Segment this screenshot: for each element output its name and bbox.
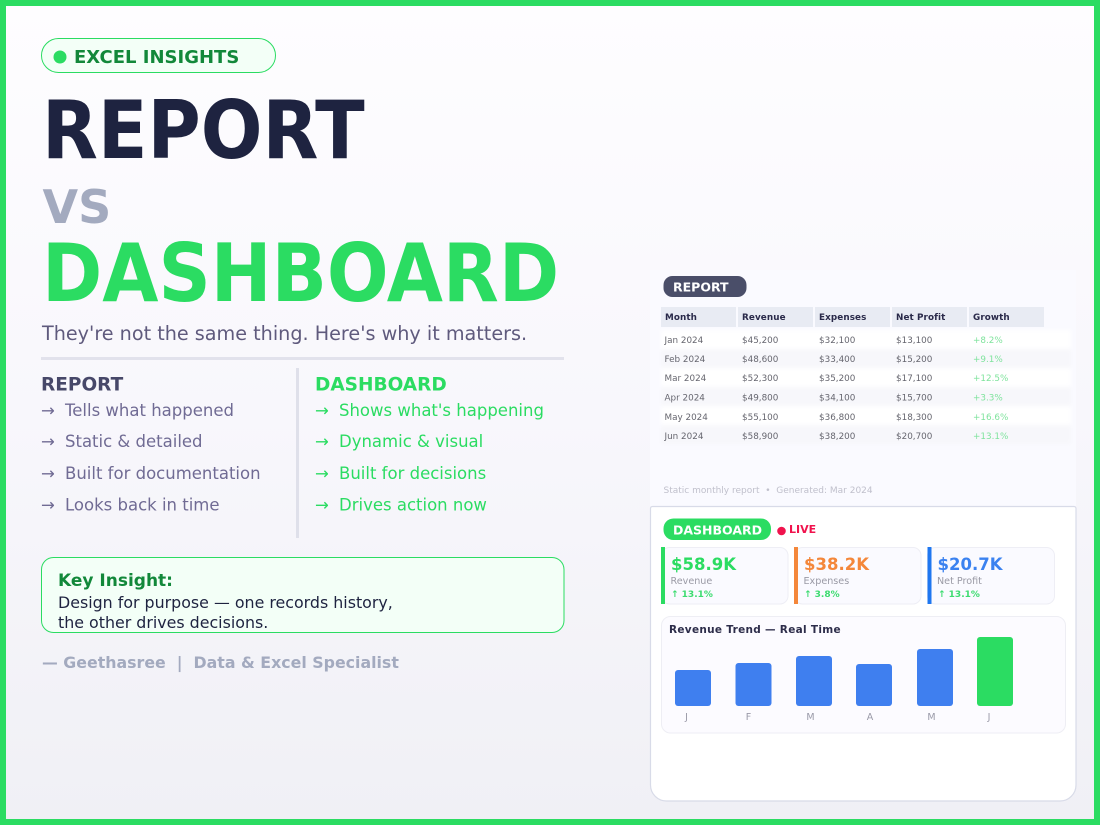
title: vs: VS [42,180,111,234]
kpi card: net profit: Net Profit [937,576,982,587]
comparison column: dashboard [315,374,544,514]
report table: Net Profit [896,313,945,323]
report table: +13.1% [973,432,1008,442]
bar chart: revenue trend: Revenue Trend — Real Time [669,624,841,636]
report table: $20,700 [896,432,933,442]
report table: Month [665,313,697,323]
callout: key insight: Design for purpose — one records history, [58,593,393,612]
comparison column: dashboard: → [315,464,329,483]
comparison column: dashboard: → [315,432,329,451]
comparison column: report: → [41,432,55,451]
report table: $35,200 [819,374,856,384]
report table: +8.2% [973,336,1003,346]
live indicator: LIVE [789,523,816,536]
report table: +12.5% [973,374,1008,384]
comparison column: report: Built for documentation [65,464,261,483]
report table: $15,200 [896,355,933,365]
callout: key insight [42,558,564,632]
comparison column: dashboard: Drives action now [339,496,487,514]
live indicator [777,523,816,536]
report table: $33,400 [819,355,856,365]
badge: excel insights: EXCEL INSIGHTS [74,47,239,68]
bar chart: revenue trend [662,616,1066,733]
kpi card: net profit [928,547,1054,604]
kpi card: revenue: Revenue [670,576,712,587]
report table: +3.3% [973,394,1003,404]
panel: dashboard [650,506,1076,801]
callout: key insight: the other drives decisions. [58,613,268,632]
comparison column: report [41,374,261,514]
panel: report [650,270,1076,506]
comparison column: report: Static & detailed [65,432,203,451]
report table: +16.6% [973,413,1008,423]
bar chart: revenue trend: M [806,712,815,723]
report table: Mar 2024 [664,374,707,384]
report table: $17,100 [896,374,933,384]
kpi card: expenses: ↑ 3.8% [804,590,840,600]
comparison column: dashboard: → [315,401,329,420]
comparison column: dashboard: Dynamic & visual [339,432,483,451]
comparison column: report: Tells what happened [64,401,234,420]
bar chart: revenue trend: A [867,712,874,723]
dashboard label: DASHBOARD [673,522,762,538]
kpi card: expenses [794,547,921,604]
comparison column: report: → [41,464,55,483]
report table: Expenses [819,313,866,323]
report table: $38,200 [819,432,856,442]
report table: Jun 2024 [664,432,704,442]
report label: REPORT [673,280,729,294]
kpi card: expenses: Expenses [804,576,849,587]
comparison column: report: REPORT [41,374,124,396]
comparison column: dashboard: Shows what's happening [339,401,544,420]
author credit: — Geethasree | Data & Excel Specialist [42,653,399,673]
bar chart: revenue trend: M [927,712,936,723]
kpi card: revenue [661,547,788,604]
report label [664,276,746,297]
report table: $58,900 [742,432,779,442]
dashboard label [664,518,771,540]
report table: $34,100 [819,394,856,404]
report footnote: Static monthly report • Generated: Mar 2024 [664,486,873,496]
comparison column: dashboard: DASHBOARD [315,374,447,396]
comparison column: report: Looks back in time [65,496,220,514]
report table: $55,100 [742,413,779,423]
comparison column: report: → [41,401,55,420]
report table: $13,100 [896,336,933,346]
report table: $45,200 [742,336,779,346]
title: dashboard: DASHBOARD [42,228,559,321]
kpi card: expenses: $38.2K [804,555,870,574]
comparison column: dashboard: → [315,496,329,514]
report table: $32,100 [819,336,856,346]
report table: +9.1% [973,355,1003,365]
report table: $49,800 [742,394,779,404]
report table: $36,800 [819,413,856,423]
report table: Feb 2024 [664,355,706,365]
comparison column: dashboard: Built for decisions [339,464,486,483]
kpi card: net profit: $20.7K [938,555,1004,574]
report table: Growth [973,313,1010,323]
tagline: They're not the same thing. Here's why it matters. [41,322,527,345]
bar chart: revenue trend: J [987,712,990,723]
comparison column: report: → [41,496,55,514]
report table: Jan 2024 [664,336,704,346]
report table: $18,300 [896,413,933,423]
title: report: REPORT [42,85,365,178]
bar chart: revenue trend: J [684,712,688,723]
report table [661,307,1071,444]
callout: key insight: Key Insight: [58,571,173,591]
bar chart: revenue trend: F [746,712,751,723]
badge: excel insights [42,38,276,72]
report table: $48,600 [742,355,779,365]
kpi card: revenue: $58.9K [671,555,737,574]
report table: Apr 2024 [664,394,705,404]
kpi card: revenue: ↑ 13.1% [671,590,713,600]
kpi card: net profit: ↑ 13.1% [938,590,980,600]
report table: $15,700 [896,394,933,404]
report table: $52,300 [742,374,779,384]
report table: May 2024 [664,413,708,423]
report table: Revenue [742,313,786,323]
